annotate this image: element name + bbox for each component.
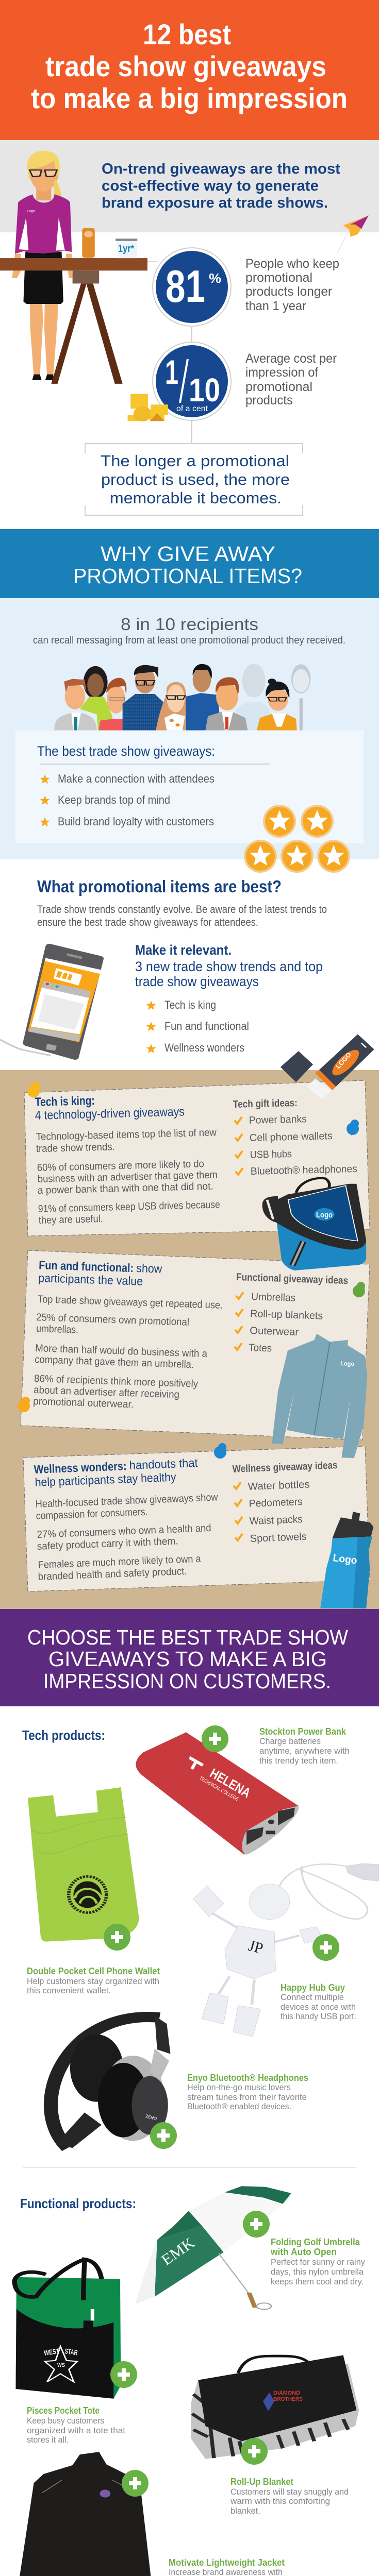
- product text: headphones: Help on-the-go music lovers: [187, 2082, 291, 2092]
- product text: headphones: [187, 2073, 308, 2111]
- tech gift ideas list: Power banks: [249, 1113, 307, 1126]
- product text: umbrella: Folding Golf Umbrella: [271, 2237, 360, 2247]
- panel: title header: [0, 0, 379, 140]
- panel: why give away heading: [0, 529, 379, 598]
- callout: longer use: The longer a promotional: [101, 452, 289, 470]
- card: tech is king: a power bank than with one that did not.: [38, 1181, 213, 1196]
- card: tech is king: 4 technology-driven giveaways: [35, 1105, 185, 1123]
- product text: Happy Hub Guy: Happy Hub Guy: [281, 1982, 345, 1993]
- title: trade show giveaways: [45, 50, 326, 82]
- product text: umbrella: days, this nylon umbrella: [271, 2267, 364, 2277]
- card: wellness wonders: [23, 1446, 370, 1591]
- product text: headphones: stream tunes from their favorite: [187, 2092, 307, 2102]
- product text: cell phone wallet: this convenient wallet.: [27, 1986, 111, 1995]
- product: umbrella: [135, 2186, 291, 2310]
- stat: one tenth of a cent: 1: [165, 353, 178, 391]
- product: black jacket: [17, 2452, 154, 2576]
- product: tote bag: WEST: [43, 2347, 60, 2357]
- stat: 81 percent: 81: [166, 261, 205, 312]
- text block: make it relevant: 3 new trade show trends and top: [135, 959, 323, 974]
- list items: [40, 772, 215, 828]
- product text: Happy Hub Guy: Connect multiple: [281, 1992, 344, 2002]
- functional giveaway ideas list: Outerwear: [250, 1325, 299, 1338]
- panel: tan corkboard background: [0, 1070, 379, 1609]
- stat text: cost per impression: Average cost per: [245, 351, 337, 366]
- wellness giveaway ideas list: Sport towels: [250, 1531, 307, 1545]
- functional giveaway ideas list: [235, 1272, 348, 1354]
- stat text: 81 percent: People who keep: [245, 257, 339, 271]
- intro heading: On-trend giveaways are the most: [102, 161, 340, 177]
- card: fun and functional: Fun and functional:: [39, 1258, 134, 1275]
- card: fun and functional: More than half would do business with a: [35, 1343, 208, 1360]
- stat: one tenth of a cent: [153, 342, 231, 420]
- product text: Stockton Power Bank: Stockton Power Bank: [259, 1726, 347, 1737]
- card: wellness wonders: safety product carry it with them.: [37, 1535, 178, 1552]
- card: fun and functional: about an advertiser after receiving: [34, 1384, 179, 1400]
- product text: blanket: warm with this comforting: [230, 2496, 330, 2506]
- stat: 81 percent: %: [209, 270, 221, 286]
- product text: tote: [27, 2405, 125, 2445]
- product: tote bag: WS: [57, 2362, 65, 2368]
- product text: cell phone wallet: [27, 1966, 160, 1995]
- panel: choose the best heading: GIVEAWAYS TO MAKE A BIG: [48, 1647, 327, 1671]
- list items: Make a connection with attendees: [58, 772, 215, 785]
- stat text: cost per impression: promotional: [245, 380, 312, 394]
- card: fun and functional: show: [136, 1261, 162, 1276]
- icon: pushpins: [18, 1082, 365, 1459]
- product text: Happy Hub Guy: this handy USB port.: [281, 2011, 356, 2021]
- icon: paper airplane: [337, 215, 369, 253]
- calendar text: 1yr*: [118, 243, 134, 255]
- stat text: 81 percent: promotional: [245, 270, 312, 285]
- callout: longer use: memorable it becomes.: [110, 489, 282, 507]
- card: wellness wonders: 27% of consumers who own a health and: [37, 1522, 211, 1540]
- tech gift ideas list: Tech gift ideas:: [233, 1097, 298, 1110]
- stat: one tenth of a cent: 10: [189, 371, 220, 409]
- functional giveaway ideas list: Functional giveaway ideas: [236, 1272, 348, 1286]
- panel: best trade show giveaways list: [15, 731, 364, 843]
- wellness giveaway ideas list: Waist packs: [249, 1514, 303, 1527]
- product: phone wallet: [28, 1787, 139, 1951]
- product: tote bag: STAR: [64, 2347, 78, 2357]
- product text: umbrella: keeps them cool and dry.: [271, 2277, 364, 2286]
- icon: messenger bag: Logo: [316, 1211, 333, 1219]
- card: tech is king: 60% of consumers are more likely to do: [37, 1158, 204, 1174]
- heading: functional products: Functional products:: [20, 2196, 136, 2211]
- product text: jacket: [169, 2557, 285, 2576]
- heading: what promotional items are best: What promotional items are best?: [37, 877, 282, 896]
- card: fun and functional: Top trade show giveaways get repeated use.: [38, 1294, 223, 1311]
- product text: umbrella: Perfect for sunny or rainy: [271, 2257, 365, 2267]
- callout: longer use: product is used, the more: [101, 470, 290, 488]
- functional giveaway ideas list: Roll-up blankets: [250, 1308, 323, 1322]
- product text: headphones: Enyo Bluetooth® Headphones: [187, 2073, 308, 2083]
- product: USB hub guy: JP: [246, 1937, 265, 1957]
- product text: blanket: [230, 2477, 349, 2516]
- stat text: cost per impression: impression of: [245, 365, 318, 380]
- stat text: cost per impression: products: [245, 393, 293, 408]
- text block: trends intro: ensure the best trade show giveaways for attendees.: [37, 917, 258, 928]
- list items: Keep brands top of mind: [58, 793, 170, 806]
- product text: tote: Keep busy customers: [27, 2416, 104, 2426]
- illustration: woman at table: [0, 151, 157, 384]
- text block: make it relevant: Fun and functional: [164, 1020, 249, 1032]
- product text: cell phone wallet: Double Pocket Cell Phone Wallet: [27, 1966, 160, 1976]
- product text: jacket: Motivate Lightweight Jacket: [169, 2557, 285, 2568]
- card: wellness wonders: Health-focused trade show giveaways show: [35, 1492, 218, 1510]
- card: wellness wonders: Wellness wonders:: [34, 1459, 127, 1476]
- intro heading: [102, 161, 340, 211]
- tech gift ideas list: USB hubs: [250, 1148, 292, 1161]
- product text: cell phone wallet: Help customers stay organized with: [27, 1976, 159, 1986]
- product: power bank: [136, 1725, 299, 1855]
- card: wellness wonders: branded health and safety product.: [38, 1566, 187, 1583]
- product: tote bag: [14, 2259, 137, 2399]
- title: to make a big impression: [31, 82, 348, 114]
- product text: tote: Pisces Pocket Tote: [27, 2405, 100, 2416]
- text block: make it relevant: [135, 942, 323, 1054]
- tech gift ideas list: Bluetooth® headphones: [251, 1163, 357, 1177]
- subheading: can recall messaging from at least one promotional product they received.: [33, 635, 345, 646]
- product text: Happy Hub Guy: [281, 1982, 356, 2021]
- icon: messenger bag: [262, 1178, 366, 1270]
- product: roll-up blanket: DIAMOND: [273, 2390, 300, 2396]
- stat: one tenth of a cent: of a cent: [176, 404, 208, 413]
- title: [31, 18, 348, 114]
- product: headphones: [51, 2016, 177, 2149]
- icon: star coins: [244, 805, 350, 873]
- text block: make it relevant: trade show giveaways: [135, 974, 259, 989]
- icon: teal jacket: Logo: [340, 1360, 355, 1367]
- product text: blanket: blanket.: [230, 2506, 260, 2516]
- panel: intro band: [0, 140, 379, 232]
- stat text: cost per impression: [245, 351, 337, 408]
- product text: Stockton Power Bank: Charge batteries: [259, 1736, 321, 1746]
- product text: tote: organized with a tote that: [27, 2426, 125, 2435]
- card: fun and functional: 25% of consumers own promotional: [36, 1312, 189, 1328]
- wellness giveaway ideas list: Water bottles: [248, 1479, 310, 1493]
- list items: Build brand loyalty with customers: [58, 815, 214, 828]
- product text: Stockton Power Bank: this trendy tech item.: [259, 1756, 338, 1766]
- heading: 8 in 10 recipients: 8 in 10 recipients: [121, 615, 258, 634]
- card: tech is king: [24, 1080, 370, 1236]
- illustration: phone with cord: [0, 944, 104, 1060]
- panel: choose the best heading: [0, 1609, 379, 1706]
- icon: blue water bottle: Logo: [332, 1552, 358, 1567]
- text block: trends intro: [37, 904, 327, 928]
- product: headphones: ZENO: [145, 2113, 157, 2122]
- card: fun and functional: company that gave them an umbrella.: [35, 1354, 194, 1370]
- panel: why give away heading: WHY GIVE AWAY: [101, 542, 275, 566]
- icon: teal jacket: [272, 1334, 367, 1458]
- product text: blanket: Roll-Up Blanket: [230, 2477, 293, 2487]
- product: power bank: TECHNICAL COLLEGE: [198, 1775, 240, 1803]
- card: tech is king: Tech is king:: [35, 1094, 95, 1109]
- panel: why give away heading: PROMOTIONAL ITEMS?: [73, 564, 302, 588]
- card: fun and functional: participants the value: [38, 1271, 143, 1288]
- card: fun and functional: umbrellas.: [36, 1323, 79, 1336]
- illustration: ten people: [54, 664, 310, 731]
- card: wellness wonders: compassion for consumers.: [36, 1506, 148, 1522]
- card: fun and functional: [21, 1250, 370, 1440]
- text block: make it relevant: Wellness wonders: [164, 1041, 244, 1054]
- card: wellness wonders: handouts that: [129, 1456, 199, 1472]
- card: fun and functional: 86% of recipients think more positively: [34, 1373, 198, 1390]
- wellness giveaway ideas list: [232, 1460, 338, 1545]
- text block: make it relevant: Make it relevant.: [135, 942, 232, 958]
- product: roll-up blanket: BROTHERS: [273, 2396, 303, 2402]
- shirt logo: Logo: [27, 210, 36, 213]
- product text: umbrella: with Auto Open: [270, 2247, 337, 2257]
- product text: tote: stores it all.: [27, 2435, 69, 2445]
- card: tech is king: trade show trends.: [36, 1141, 115, 1155]
- stat text: 81 percent: products longer: [245, 284, 332, 299]
- panel: recipients: [0, 598, 379, 859]
- card: wellness wonders: help participants stay healthy: [35, 1470, 176, 1489]
- wellness giveaway ideas list: Pedometers: [249, 1496, 303, 1510]
- heading: tech products: Tech products:: [22, 1727, 105, 1743]
- tech gift ideas list: Cell phone wallets: [250, 1130, 333, 1144]
- USB logo: LOGO: [334, 1050, 353, 1070]
- text block: trends intro: Trade show trends constantly evolve. Be aware of the latest trends to: [37, 904, 327, 916]
- tech gift ideas list: [233, 1097, 357, 1177]
- product: umbrella: EMK: [158, 2234, 198, 2269]
- stat: 81 percent: [153, 248, 231, 326]
- product text: blanket: Customers will stay snuggly and: [230, 2487, 349, 2497]
- product: USB hub guy: [193, 1863, 379, 2037]
- card: fun and functional: promotional outerwear.: [33, 1396, 134, 1410]
- product text: Stockton Power Bank: [259, 1726, 350, 1766]
- icon: blue water bottle: [320, 1512, 373, 1608]
- stat text: 81 percent: [245, 257, 339, 313]
- card: tech is king: business with an advertiser that gave them: [38, 1169, 218, 1185]
- title: 12 best: [143, 18, 231, 50]
- icon: USB drive and memory card: [281, 1034, 374, 1099]
- product: roll-up blanket: [191, 2355, 359, 2465]
- card: tech is king: 91% of consumers keep USB drives because: [38, 1199, 220, 1215]
- product: power bank: HELENA: [207, 1765, 254, 1801]
- card: tech is king: Technology-based items top the list of new: [36, 1127, 217, 1143]
- list heading: The best trade show giveaways:: [37, 743, 215, 759]
- stat text: 81 percent: than 1 year: [245, 299, 306, 313]
- chart line: connectors: [191, 327, 192, 444]
- intro heading: cost-effective way to generate: [102, 178, 319, 194]
- card: wellness wonders: Females are much more likely to own a: [38, 1553, 202, 1571]
- intro heading: brand exposure at trade shows.: [102, 195, 328, 211]
- product text: Happy Hub Guy: devices at once with: [281, 2002, 356, 2012]
- product text: Stockton Power Bank: anytime, anywhere with: [259, 1746, 350, 1756]
- panel: choose the best heading: CHOOSE THE BEST TRADE SHOW: [27, 1625, 348, 1649]
- product text: headphones: Bluetooth® enabled devices.: [187, 2102, 291, 2111]
- product text: umbrella: [270, 2237, 365, 2286]
- callout: longer use: [85, 444, 303, 515]
- icon: coins: [128, 394, 168, 421]
- panel: choose the best heading: IMPRESSION ON CUSTOMERS.: [43, 1669, 331, 1693]
- functional giveaway ideas list: Totes: [249, 1342, 272, 1354]
- card: tech is king: they are useful.: [39, 1213, 103, 1226]
- functional giveaway ideas list: Umbrellas: [251, 1291, 296, 1304]
- text block: make it relevant: Tech is king: [164, 998, 216, 1011]
- wellness giveaway ideas list: Wellness giveaway ideas: [232, 1460, 338, 1475]
